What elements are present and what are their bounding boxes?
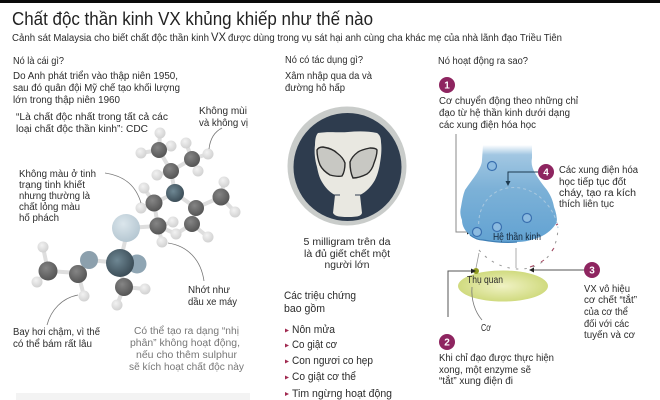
step 1: các xung điện hóa học — [439, 120, 536, 131]
list: symptoms: Tim ngừng hoạt động — [292, 388, 392, 400]
callout: evaporates slowly: Bay hơi chậm, vì thế — [13, 326, 100, 338]
heading: how does it work: Nó hoạt động ra sao? — [438, 56, 528, 67]
step 4: học tiếp tục đốt — [559, 176, 626, 188]
callout: evaporates slowly — [13, 295, 100, 350]
callout: colourless: trạng tinh khiết — [19, 179, 85, 191]
step 4: thích liên tục — [559, 199, 614, 210]
subtitle: được dùng trong vụ sát hại anh cùng cha khác mẹ của nhà lãnh đạo Triều Tiên — [228, 32, 562, 44]
panel: how does it work — [438, 56, 638, 387]
step 1: Cơ chuyển động theo những chỉ — [439, 95, 579, 107]
note: binary form: phân” không hoạt động, — [130, 338, 240, 349]
text block: lethal dose: người lớn — [324, 260, 370, 271]
callout: colourless: nhưng thường là — [19, 191, 90, 202]
note: binary form: sẽ kích hoạt chất độc này — [129, 361, 244, 373]
diagram: muscle receptor — [458, 268, 548, 302]
text block: lethal dose — [304, 237, 391, 271]
heading: what is it: Nó là cái gì? — [13, 56, 64, 67]
text block: origin: lớn trong thập niên 1960 — [13, 95, 120, 106]
step 1 — [439, 77, 579, 131]
text block: lethal dose: là đủ giết chết một — [304, 248, 390, 260]
label: muscle: Cơ — [481, 323, 491, 334]
step 4: Các xung điện hóa — [559, 165, 638, 176]
text block: entry routes: Xâm nhập qua da và — [285, 71, 372, 82]
list: symptoms: Co giật cơ thể — [292, 371, 356, 383]
panel: what is it — [13, 56, 250, 400]
step 3: tuyến và cơ — [584, 329, 635, 341]
panel: what does it do — [284, 55, 406, 400]
step 2 — [439, 268, 554, 387]
callout: viscous — [168, 243, 237, 308]
heading: symptoms — [284, 290, 356, 315]
text block: entry routes: đường hô hấp — [285, 82, 345, 94]
step 2: Khi chỉ đạo được thực hiện — [439, 352, 554, 364]
text block: origin — [13, 70, 180, 106]
step 3 — [529, 262, 637, 341]
arrow: step 1 to nerve — [456, 134, 472, 234]
callout: viscous: Nhớt như — [188, 285, 230, 296]
label: nervous system: Hệ thần kinh — [493, 231, 541, 243]
step 1: 1 — [444, 80, 450, 92]
callout: odourless — [199, 106, 248, 149]
step 3: VX vô hiệu — [584, 284, 630, 295]
note: binary form — [129, 325, 244, 373]
step 2: “tắt” xung điện đi — [439, 374, 513, 387]
subtitle: Cảnh sát Malaysia cho biết chất độc thần kinh — [12, 32, 209, 44]
heading: what does it do: Nó có tác dụng gì? — [285, 55, 363, 66]
quote: CDC: “Là chất độc nhất trong tất cả các — [16, 111, 168, 123]
heading: symptoms: bao gồm — [284, 303, 325, 315]
note: binary form: nếu cho thêm sulphur — [136, 349, 238, 361]
step 3: đối với các — [584, 318, 629, 330]
title: Chất độc thần kinh VX khủng khiếp như thế nào — [12, 8, 373, 29]
list: symptoms: Co giật cơ — [292, 339, 337, 351]
step 3: cơ chết “tắt” — [584, 293, 637, 306]
diagram: nerve ending — [460, 145, 558, 269]
step 4 — [506, 164, 638, 210]
text block: entry routes — [285, 71, 372, 94]
step 1: đạo từ hệ thần kinh dưới dạng — [439, 107, 570, 119]
top black bar — [0, 0, 660, 3]
diagram: muscle receptor: Thụ quan — [467, 275, 503, 286]
text block: origin: sau đó quân đội Mỹ chế tạo khối lượng — [13, 82, 180, 94]
callout: odourless: Không mùi — [199, 106, 247, 117]
list: symptoms: Nôn mửa — [292, 324, 336, 336]
heading: symptoms: Các triệu chứng — [284, 290, 356, 302]
label: muscle — [472, 287, 491, 334]
bottom grey strip — [16, 393, 250, 400]
step 2: 2 — [444, 338, 450, 348]
step 4: cháy, tạo ra kích — [559, 188, 636, 199]
step 3: của cơ thể — [584, 306, 628, 318]
list: symptoms: Con ngươi co hẹp — [292, 355, 373, 367]
step 4: 4 — [543, 168, 549, 178]
callout: odourless: và không vị — [199, 118, 248, 129]
icon: gas mask — [288, 106, 406, 226]
callout: colourless: hố phách — [19, 212, 59, 224]
quote: CDC — [16, 111, 168, 135]
subtitle — [12, 30, 562, 44]
callout: colourless: chất lỏng màu — [19, 201, 80, 213]
list: symptoms — [285, 324, 392, 400]
text block: origin: Do Anh phát triển vào thập niên 1950, — [13, 70, 178, 82]
callout: viscous: dầu xe máy — [188, 296, 237, 308]
callout: colourless: Không màu ở tinh — [19, 168, 96, 180]
step 2: xong, một enzyme sẽ — [439, 365, 531, 376]
molecule diagram — [32, 128, 240, 310]
callout: colourless — [19, 168, 141, 224]
text block: lethal dose: 5 milligram trên da — [304, 237, 391, 248]
step 3: 3 — [589, 266, 595, 276]
callout: evaporates slowly: có thể bám rất lâu — [13, 338, 92, 350]
note: binary form: Có thể tạo ra dạng “nhị — [134, 325, 239, 337]
quote: CDC: loại chất độc thần kinh”: CDC — [16, 123, 148, 135]
subtitle: VX — [211, 30, 226, 44]
